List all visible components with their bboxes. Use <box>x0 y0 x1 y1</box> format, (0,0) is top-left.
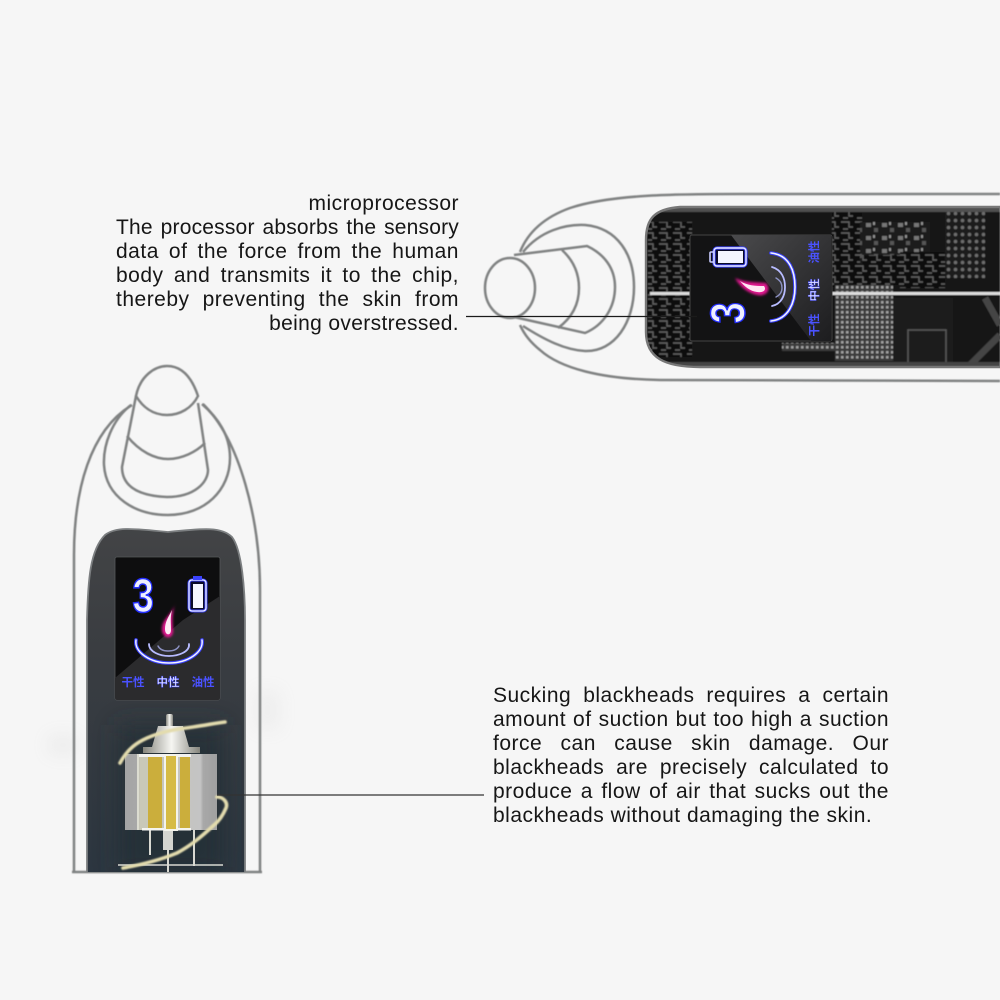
text block: suction: amount of suction but too high a suction <box>493 708 889 731</box>
suction ripple icon <box>771 253 795 321</box>
device outline: horizontal body <box>485 194 1000 381</box>
text block: microprocessor: thereby preventing the skin from <box>116 288 459 311</box>
suction ripple icon <box>136 640 202 663</box>
motor pins and base <box>118 830 223 872</box>
digit: speed level: 3 <box>702 302 760 324</box>
text block: suction: blackheads without damaging the skin. <box>493 804 872 827</box>
airflow swirl <box>120 722 227 868</box>
vertical device illustration <box>71 364 263 874</box>
text block: suction: produce a flow of air that sucks out the <box>493 780 889 803</box>
leader line: motor <box>217 794 484 796</box>
battery icon <box>710 248 746 266</box>
text block: suction: Sucking blackheads requires a certain <box>493 684 889 707</box>
battery icon <box>189 576 206 611</box>
panel border <box>646 207 1000 367</box>
motor core <box>125 754 217 830</box>
digit: speed level: 3 <box>132 571 154 628</box>
skin type labels: 油性 <box>807 240 821 264</box>
dark circuit-board panel <box>645 206 1000 368</box>
text block: microprocessor <box>116 192 459 335</box>
text block: microprocessor: data of the force from the human <box>116 240 459 263</box>
skin type labels: 油性 <box>192 675 215 689</box>
skin type labels <box>807 240 821 336</box>
text block: microprocessor: The processor absorbs the sensory <box>116 216 459 239</box>
leader line: microprocessor <box>466 316 697 318</box>
horizontal device illustration <box>485 194 1000 381</box>
text block: microprocessor: microprocessor <box>308 192 459 215</box>
display screen, horizontal <box>690 235 832 341</box>
motor top shaft <box>143 714 200 753</box>
text block: suction: blackheads are precisely calculated to <box>493 756 889 779</box>
skin type labels: 中性 <box>807 278 821 302</box>
dark panel <box>85 525 247 875</box>
device outline: vertical body <box>72 366 262 872</box>
text block: suction <box>493 684 889 827</box>
drop icon <box>735 278 768 295</box>
text block: microprocessor: body and transmits it to the chip, <box>116 264 459 287</box>
skin type labels: 干性 <box>807 313 821 336</box>
skin type labels <box>122 675 215 689</box>
text block: suction: force can cause skin damage. Our <box>493 732 889 755</box>
soft shadow behind device <box>48 690 280 755</box>
text block: microprocessor: being overstressed. <box>269 312 459 335</box>
display screen, vertical <box>115 557 220 700</box>
skin type labels: 干性 <box>122 675 145 689</box>
skin type labels: 中性 <box>156 675 180 689</box>
drop icon <box>162 602 176 637</box>
motor illustration <box>118 714 227 872</box>
